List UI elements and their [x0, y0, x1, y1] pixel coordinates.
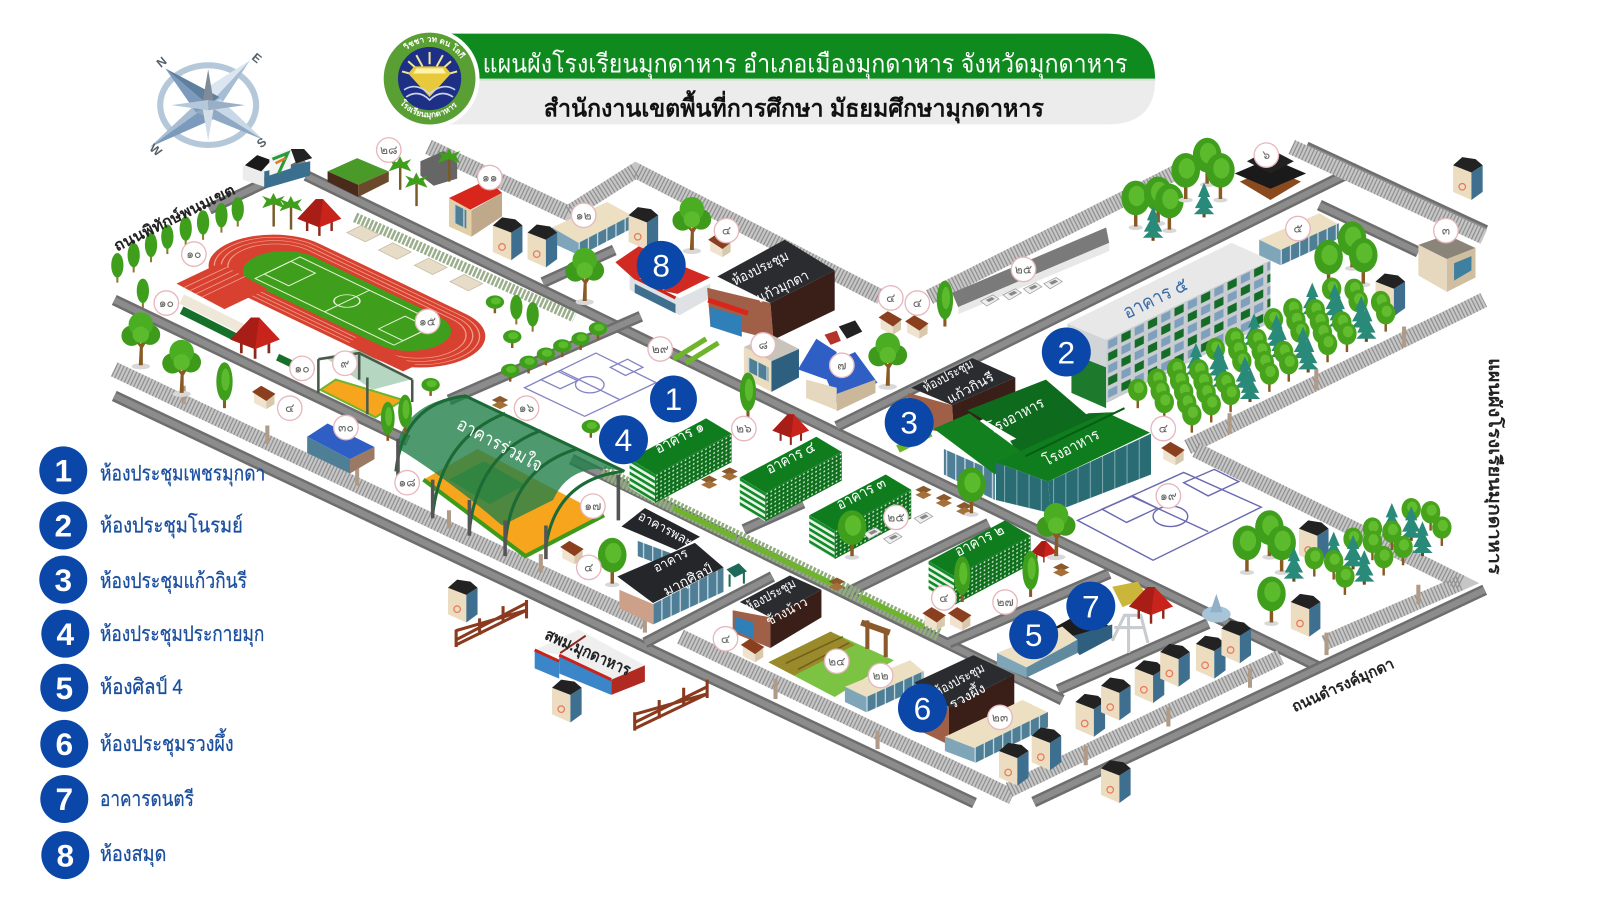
numbered markers: ๕ [1293, 222, 1303, 236]
map marker 7: 7 [1082, 588, 1100, 624]
boundary fences [114, 147, 1484, 797]
label line two: แก้วมุกดา [754, 268, 812, 307]
building 8 south [744, 335, 799, 392]
small huts and pavilions [230, 199, 1185, 662]
building 22 [845, 660, 923, 712]
map marker 8 [637, 241, 686, 290]
numbered markers: ๔ [285, 401, 294, 415]
building 28 [328, 151, 457, 197]
map marker 6 [898, 684, 947, 733]
numbered markers: ๘ [759, 338, 768, 352]
water tower and fountain [1112, 594, 1231, 653]
legend item 4 [41, 610, 264, 658]
blue building 30 [307, 423, 374, 473]
sports building [621, 508, 700, 571]
numbered markers: ๑๒ [576, 208, 592, 222]
label line two: รวงผึ้ง [946, 679, 988, 712]
map marker 6: 6 [914, 690, 931, 726]
numbered markers: ๒๒ [873, 669, 889, 683]
meeting hall Kaew Mukda [707, 240, 835, 340]
north mark: N [154, 54, 170, 70]
legend item 8: ห้องสมุด [100, 842, 166, 867]
numbered markers [154, 138, 1458, 730]
label: อาคารพละ [636, 508, 695, 549]
label: อาคาร [651, 545, 690, 575]
label building 1: อาคาร ๑ [652, 418, 707, 457]
numbered markers: ๒๕ [1015, 262, 1032, 276]
label south: โรงอาหาร [1040, 425, 1102, 470]
numbered markers: ๔ [721, 632, 730, 646]
numbered markers: ๔ [886, 291, 895, 305]
legend item 2: ห้องประชุมโนรมย์ [100, 513, 243, 539]
picnic benches and cars [492, 396, 1069, 591]
legend item 6: ห้องประชุมรวงผึ้ง [100, 728, 234, 757]
education office building [535, 626, 645, 695]
subtitle text: สำนักงานเขตพื้นที่การศึกษา มัธยมศึกษามุกดาหาร [544, 89, 1045, 124]
numbered markers: ๑๖ [519, 401, 535, 415]
legend item 1: 1 [54, 453, 72, 489]
numbered markers: ๔ [1159, 422, 1168, 436]
title text: แผนผังโรงเรียนมุกดาหาร อำเภอเมืองมุกดาหาร จังหวัดมุกดาหาร [483, 49, 1128, 79]
building 23 [945, 700, 1048, 763]
label: ห้องประชุม [931, 660, 987, 700]
legend item 4: 4 [57, 616, 75, 652]
numbered markers: ๔ [939, 591, 949, 605]
legend item 5 [40, 664, 183, 712]
road label west: ถนนพิทักษ์พนมเขต [111, 181, 238, 255]
numbered markers: ๑๕ [419, 315, 436, 329]
south mark: S [254, 135, 269, 151]
map marker 4: 4 [615, 422, 632, 458]
legend item 3: ห้องประชุมแก้วกินรี [100, 569, 247, 594]
label: อาคาร ๕ [1120, 274, 1192, 324]
track straight extensions [177, 263, 416, 371]
label north: โรงอาหาร [985, 394, 1047, 438]
numbered markers: ๒๓ [992, 710, 1008, 724]
legend item 1 [39, 446, 265, 494]
label: ห้องประชุม [742, 575, 799, 615]
legend item 8 [41, 831, 166, 879]
legend item 2: 2 [54, 508, 72, 544]
map marker 7 [1066, 582, 1115, 631]
road network [114, 147, 1486, 803]
map marker 8: 8 [652, 248, 670, 284]
map marker 2 [1042, 328, 1091, 377]
label building 2: อาคาร ๒ [952, 521, 1007, 561]
numbered markers: ๔ [584, 560, 593, 574]
map marker 5: 5 [1025, 617, 1042, 653]
numbered markers: ๑๐ [294, 361, 310, 375]
trees [111, 138, 1378, 626]
title banner [449, 34, 1155, 124]
hall label: อาคารร่วมใจ [454, 413, 546, 476]
numbered markers: ๙ [340, 356, 349, 370]
numbered markers: ๗ [837, 358, 846, 372]
wooden fences outside school [456, 600, 707, 731]
numbered markers: ๓๐ [338, 421, 354, 435]
map marker 3 [885, 398, 934, 447]
carport 25 [952, 228, 1109, 314]
court 9 [318, 349, 412, 417]
compass rose [147, 50, 269, 159]
legend [39, 446, 265, 879]
building 5 [1067, 243, 1270, 408]
legend item 4: ห้องประชุมประกายมุก [100, 622, 264, 647]
numbered markers: ๑๐ [186, 247, 201, 261]
numbered markers: ๒๕ [887, 510, 905, 524]
legend item 3: 3 [54, 562, 72, 598]
school logo [384, 32, 480, 124]
meeting room Chang Nao [733, 575, 821, 648]
logo motto: วิชชา วท ดน โลกี [403, 37, 466, 59]
numbered markers: ๑๑ [482, 171, 498, 185]
library building 8 [615, 245, 710, 315]
numbered markers: ๖ [1262, 148, 1270, 162]
legend item 1: ห้องประชุมเพชรมุกดา [100, 462, 265, 487]
numbered markers: ๒๖ [736, 422, 752, 436]
forest south east [1305, 498, 1452, 595]
numbered markers: ๒๔ [828, 654, 845, 668]
numbered markers: ๑๙ [1160, 489, 1177, 503]
map marker 1 [650, 376, 697, 422]
map marker 2: 2 [1058, 334, 1075, 370]
legend item 6 [40, 720, 234, 768]
building 3 [1418, 235, 1476, 292]
parked vans [981, 278, 1062, 306]
garden 24 [768, 620, 894, 697]
small houses [448, 157, 1483, 803]
building five small [1259, 213, 1339, 265]
art building [617, 543, 723, 624]
grandstands [347, 226, 483, 291]
label: สพม.มุกดาหาร [542, 626, 634, 680]
numbered markers: ๑๐ [159, 296, 174, 310]
numbered markers: ๒๙ [652, 342, 669, 356]
meeting room Kaew Kinnaree [906, 356, 1015, 434]
road label south: ถนนดำรงค์มุกดา [1289, 655, 1397, 717]
east mark: E [249, 50, 264, 66]
cafeteria [934, 380, 1151, 513]
label: ห้องประชุม [920, 356, 976, 396]
map marker 4 [599, 415, 648, 464]
numbered markers: ๑๗ [584, 499, 601, 513]
art room and music building [997, 582, 1148, 678]
numbered markers: ๔ [913, 296, 922, 310]
running track and football field [182, 222, 512, 380]
legend item 7 [40, 775, 194, 823]
academic buildings [630, 418, 1031, 605]
label building 3: อาคาร ๓ [834, 474, 889, 514]
legend item 3 [39, 556, 247, 604]
legend item 2 [39, 502, 243, 549]
numbered markers: ๔ [722, 224, 731, 238]
label: ห้องประชุม [729, 248, 792, 289]
legend item 7: อาคารดนตรี [100, 787, 194, 811]
vertical school plan label: แผนผังโรงเรียนมุกดาหาร [1484, 358, 1506, 575]
legend item 5: ห้องศิลป์ 4 [100, 675, 183, 699]
7-Eleven shop [243, 149, 312, 189]
legend item 5: 5 [55, 670, 73, 706]
numbered markers: ๑๘ [399, 476, 416, 490]
football pitch south [1078, 469, 1261, 560]
pagoda 6 [1235, 149, 1306, 200]
label line two: แก้วกินรี [944, 369, 996, 406]
forest beside building 5 [1128, 278, 1395, 433]
meeting room Ruang Phueng [914, 655, 1014, 745]
numbered markers: ๒๘ [380, 143, 398, 157]
pergolas and hedges [355, 217, 939, 635]
label line two: ช้างน้าว [763, 594, 810, 628]
building 11 [449, 180, 502, 237]
label building 4: อาคาร ๔ [763, 439, 818, 478]
numbered markers: ๓ [1442, 224, 1450, 238]
legend item 7: 7 [55, 781, 73, 817]
west mark: W [147, 141, 165, 159]
map marker 5 [1009, 610, 1058, 659]
football pitch north [524, 353, 656, 416]
legend item 8: 8 [57, 837, 74, 873]
map marker 3: 3 [900, 405, 918, 441]
house 7 [798, 320, 878, 411]
label line two: มากูศิลป์ [661, 561, 715, 599]
map marker 1: 1 [665, 381, 682, 417]
logo school name: โรงเรียนมุกดาหาร [401, 98, 457, 120]
legend item 6: 6 [55, 726, 73, 762]
multi-purpose hall [396, 396, 624, 559]
building 12 [552, 202, 632, 256]
numbered markers: ๒๗ [996, 595, 1014, 609]
